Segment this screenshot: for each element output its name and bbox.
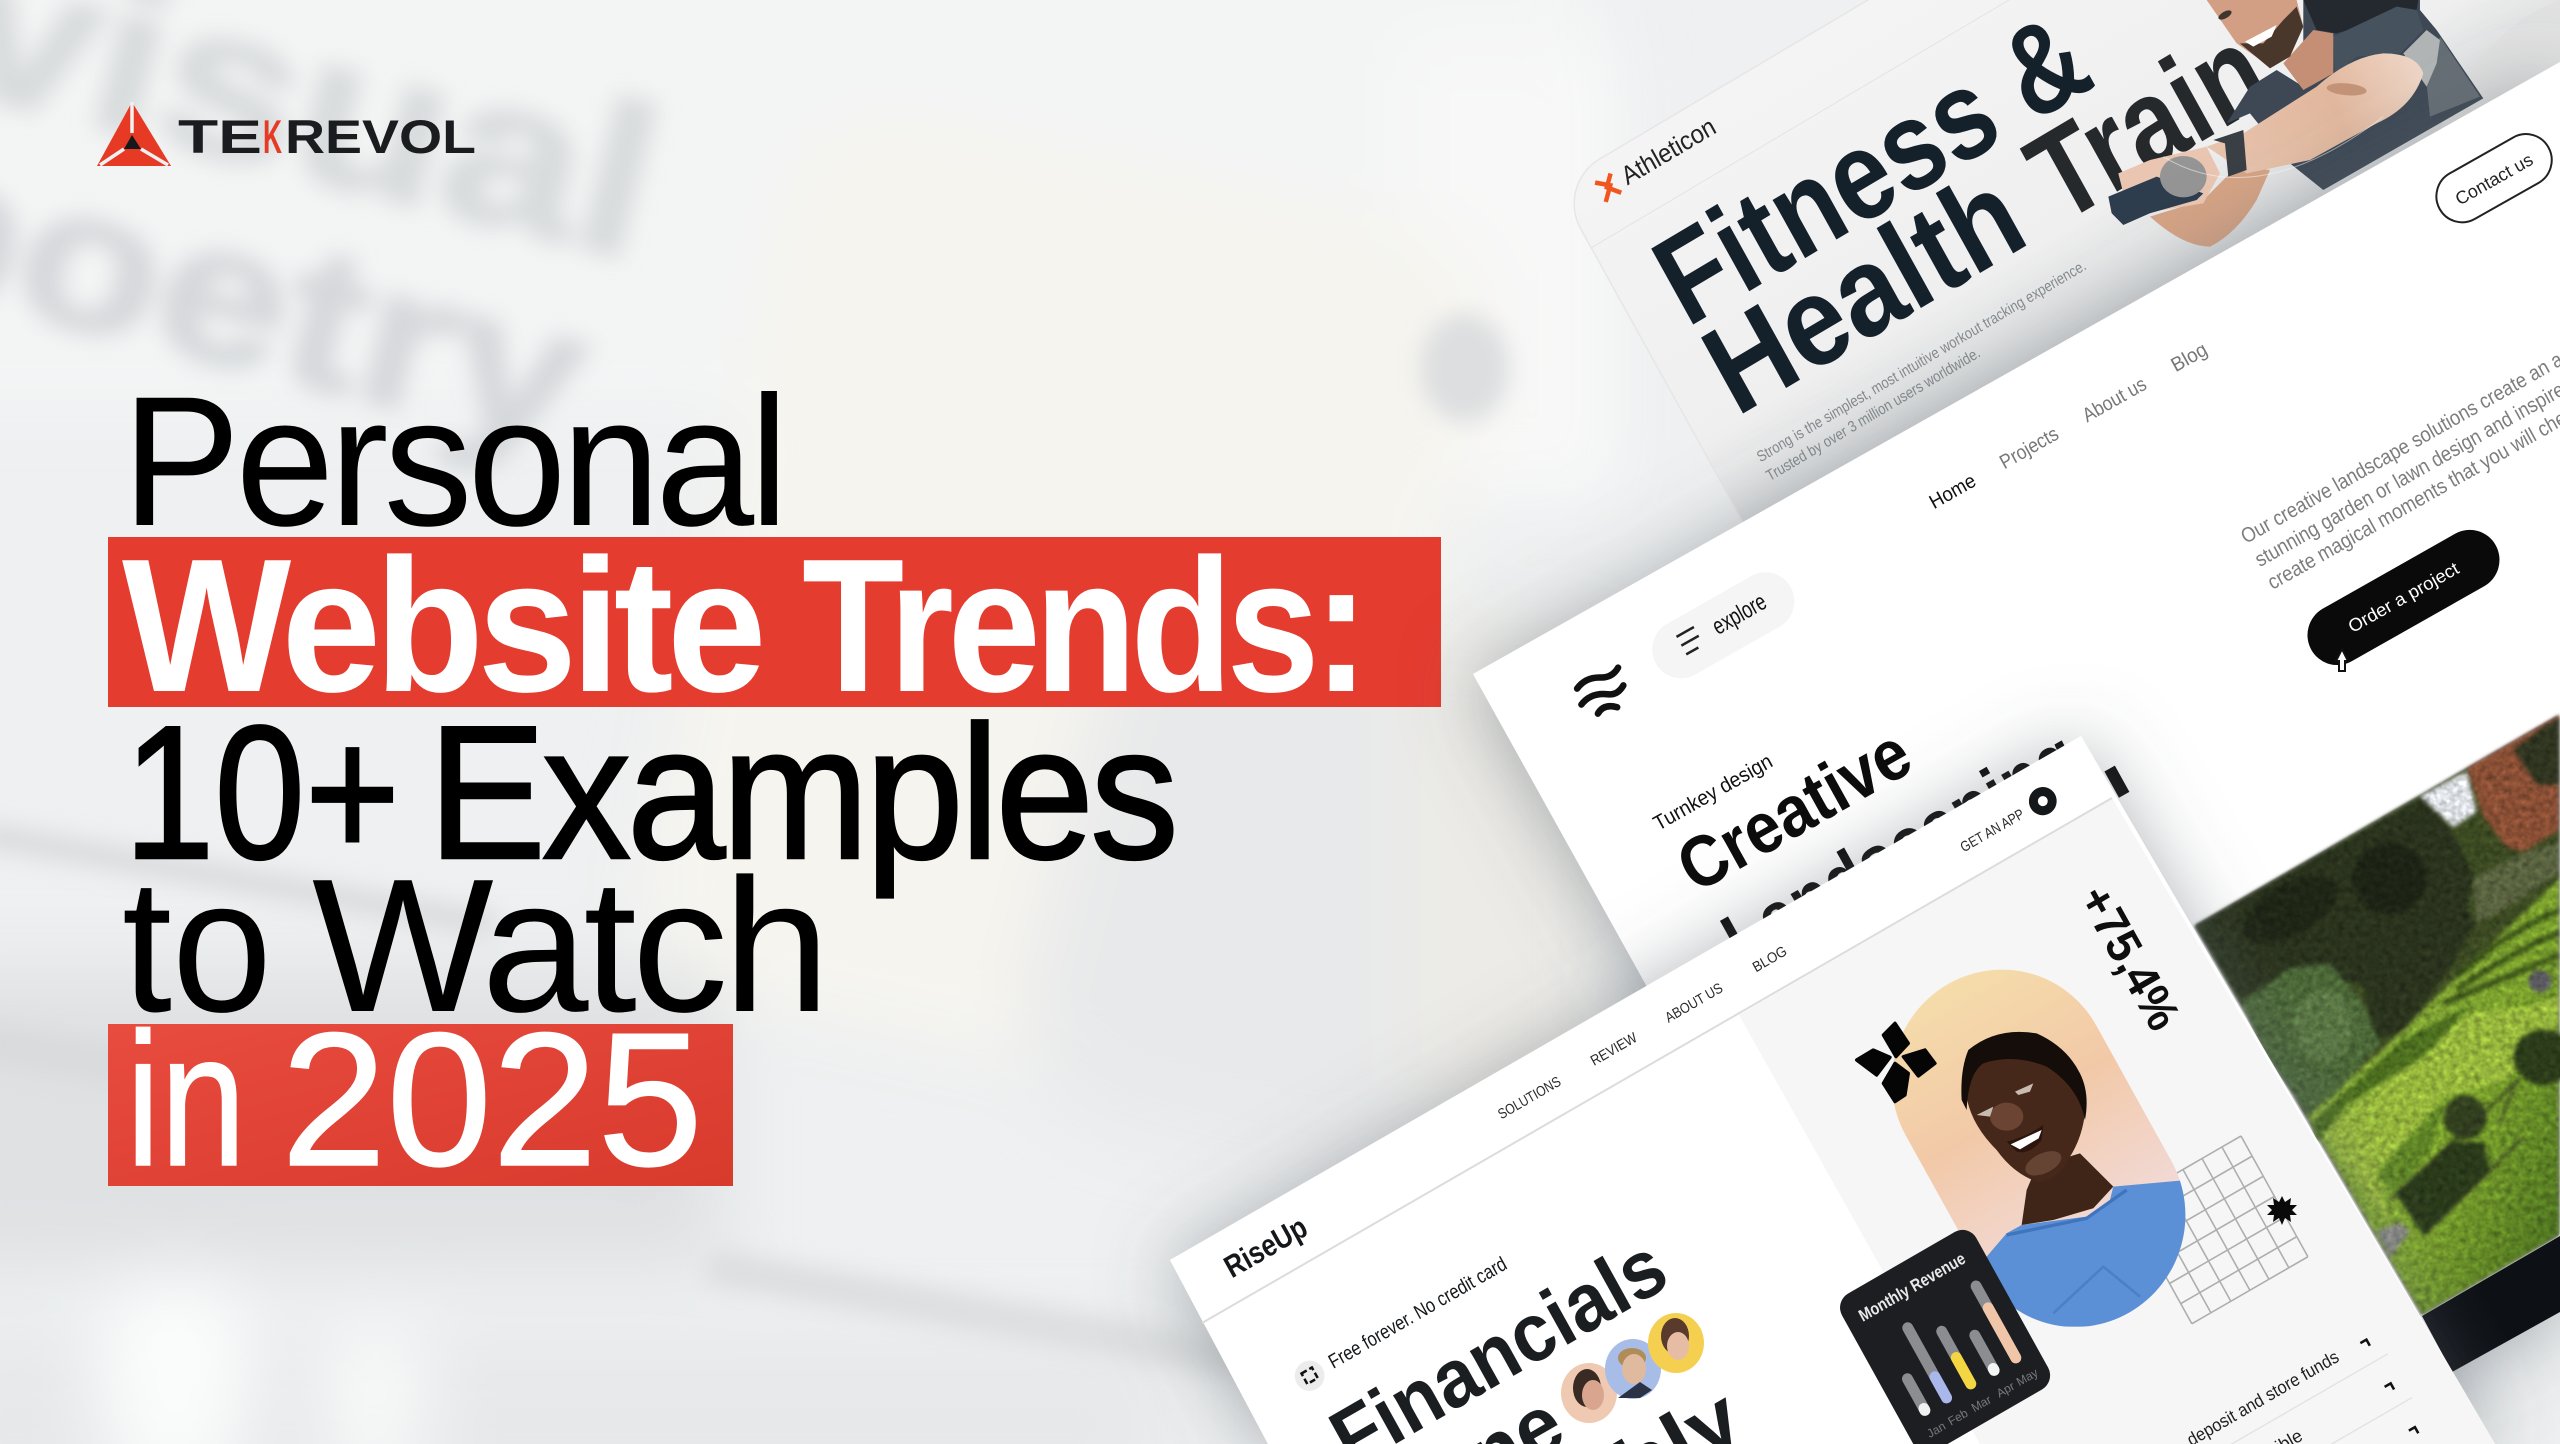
bar: Mar [1934,1324,1978,1391]
headline: Creative [1665,713,1924,908]
month labels: Apr [1994,1379,2017,1401]
icon: burst star [2267,1196,2297,1225]
chart title: Monthly Revenue [1856,1249,1969,1325]
nav: get an app: GET AN APP [1958,807,2027,856]
contact pill [2427,125,2560,232]
card contents [1565,125,2560,1007]
icon: app button [2024,782,2062,820]
order button [2297,519,2510,676]
nav: Projects: Projects [1996,423,2063,474]
title line: to Watch: to [122,840,272,1052]
landscape photo [2193,713,2560,1372]
title line: Personal: Personal [122,359,784,565]
panel: RiseUp finance site card [1170,736,2495,1444]
nav: blog: BLOG [1750,944,1790,976]
headline line 2: Landscaping [1709,716,2092,980]
order button: Order a project [2345,558,2462,637]
headline line 2: Health [1681,142,2046,441]
avatar 3 [1648,1313,1704,1373]
eyebrow: Turnkey design [1650,750,1777,835]
icon: swirl logo [1572,664,1635,722]
chart card: monthly revenue [1834,1224,2056,1444]
month labels: Jan [1924,1419,1948,1441]
month labels: May [2014,1365,2040,1389]
title line: 10+ Examples: 10+ [124,687,400,899]
title line: to Watch: Watch [312,840,825,1052]
logo: Tekrevol [97,102,476,166]
list arrows [2360,1340,2418,1437]
brand name: RiseUp [1218,1209,1313,1285]
description line 2: Trusted by over 3 million users worldwide. [1763,345,1983,485]
logo wordmark: REVOL [285,110,476,163]
title block [108,359,1441,1206]
title line: in 2025: in [126,994,246,1206]
percent stat: +75,4% [2068,877,2190,1039]
icon: Athleticon mark [1595,174,1621,202]
portrait figure [1961,1032,2187,1327]
title line: Website Trends: Website [122,520,761,732]
nav: Blog: Blog [2168,339,2211,377]
card text [1218,767,2429,1444]
avatars [1561,1313,1704,1423]
trainer figure [2108,0,2483,247]
contact pill: Contact us [2452,149,2536,209]
right panel [1739,798,2495,1444]
title line: in 2025: 2025 [281,994,703,1206]
photo footer strip [2422,1236,2560,1372]
top right glass shape [2440,0,2560,175]
avatar 2 [1605,1339,1661,1399]
eyebrow: Free forever. No credit card [1325,1253,1511,1373]
explore pill: explore [1708,588,1771,641]
card background [1473,62,2560,1372]
portrait arch [1852,929,2225,1367]
logo wordmark: K [263,110,282,163]
title line: Website Trends: Trends: [802,520,1363,732]
bar: Apr [1967,1328,2002,1378]
title line: Website Trends [122,520,1363,732]
explore pill [1642,562,1805,689]
icon: logo triangle [97,102,171,166]
description: Strong is the simplest, most intuitive workout tracking experience. [1754,257,2089,466]
logo wordmark [178,110,476,163]
highlight bar 2 [108,1024,733,1186]
nav: Home: Home [1926,470,1980,514]
bar: Feb [1900,1320,1954,1405]
month labels: Mar [1969,1392,1994,1415]
icon: pinwheel [1857,1023,1935,1102]
month labels [1924,1365,2040,1441]
highlight bar 1 [108,537,1441,707]
month labels: Feb [1946,1406,1971,1429]
title line: 10+ Examples: Examples [428,687,1175,899]
icon: free badge [1289,1355,1330,1396]
nav: About us: About us [2079,373,2150,427]
nav: review: REVIEW [1588,1030,1640,1069]
cursor icon [2336,649,2348,671]
avatar 1 [1561,1363,1617,1423]
panel: landscaping site card [1473,62,2560,1372]
title line: 10+ Examples [124,687,1175,899]
header divider [1202,798,2112,1323]
panel: Athleticon fitness site card [1556,0,2560,797]
card background [1170,736,2495,1444]
grid decoration [2125,1136,2308,1324]
bar: Jan [1900,1371,1932,1418]
card text [1593,0,2313,489]
brand name: Athleticon [1616,111,1721,191]
card surface [1556,0,2560,797]
nav: solutions: SOLUTIONS [1496,1074,1564,1123]
bar: May [1969,1278,2023,1365]
logo wordmark: TE [178,110,262,163]
nav: about us: ABOUT US [1663,981,1726,1026]
